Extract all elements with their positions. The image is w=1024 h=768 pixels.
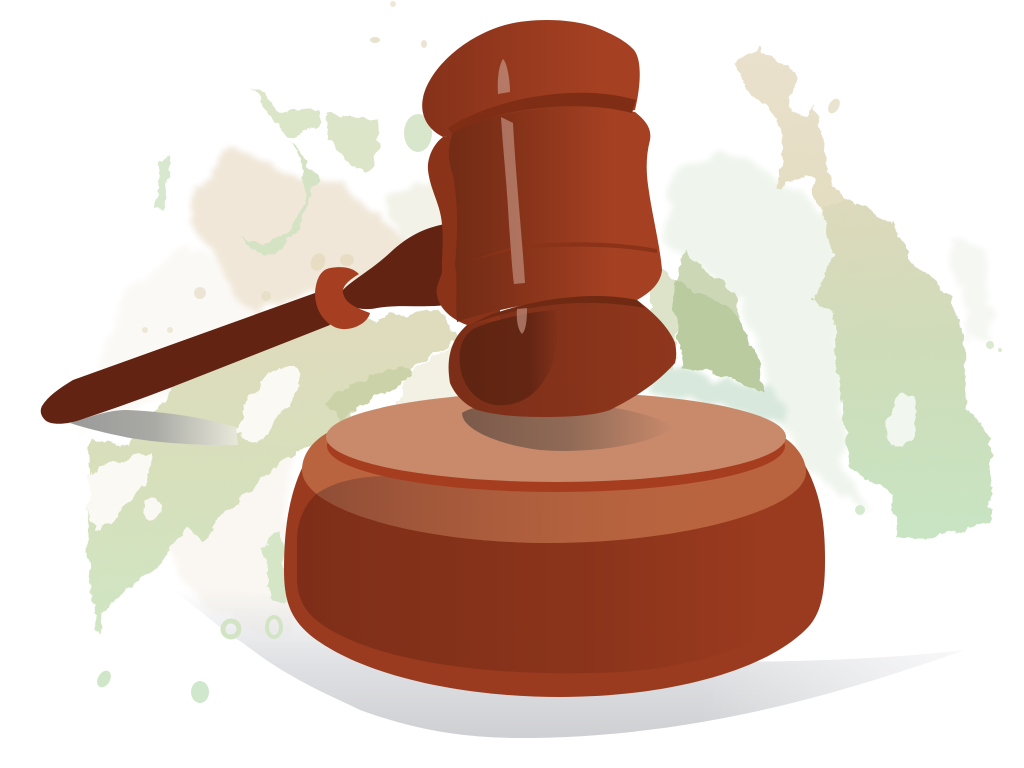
head lower dark side bbox=[460, 310, 558, 405]
floor shadow bbox=[196, 607, 951, 738]
olive and green mass left bbox=[88, 310, 458, 637]
pale green-white wash right bbox=[660, 150, 870, 510]
handle bbox=[41, 293, 330, 424]
beige streak bbox=[733, 48, 850, 240]
head middle bbox=[449, 106, 662, 322]
olive backdrop by head bbox=[650, 262, 682, 372]
head top cap bbox=[422, 20, 640, 137]
watercolor splatter bbox=[87, 48, 990, 637]
platform rim bbox=[327, 400, 785, 492]
green splash top one bbox=[250, 87, 320, 137]
highlight strip top bbox=[498, 59, 510, 94]
handle neck bbox=[341, 224, 445, 309]
upper band bbox=[448, 93, 636, 134]
highlight strip low bbox=[517, 308, 527, 334]
olive shard light cap bbox=[676, 250, 740, 320]
block body bbox=[284, 460, 825, 697]
small hole bbox=[143, 498, 161, 520]
green curve bbox=[242, 140, 320, 257]
head contact shadow bbox=[462, 402, 673, 451]
olive shard bbox=[673, 280, 765, 393]
highlight strip middle bbox=[501, 117, 525, 284]
watercolor washes bbox=[80, 147, 992, 640]
faint cream wash far left bbox=[80, 240, 260, 440]
handle shadow bbox=[70, 410, 238, 445]
handle collar bbox=[315, 267, 370, 329]
pale cream below head bbox=[150, 450, 292, 640]
top face shadow bbox=[316, 476, 552, 543]
green mass right bbox=[813, 200, 990, 537]
pale lower band right bbox=[655, 365, 790, 420]
cream tip behind head bbox=[395, 345, 462, 412]
block top face bbox=[302, 418, 806, 543]
olive dark patch bbox=[325, 365, 420, 420]
green left flecks bbox=[154, 155, 170, 210]
block inner shade bbox=[297, 476, 808, 673]
green patch next to block bbox=[262, 530, 288, 602]
hole right bbox=[886, 392, 917, 448]
pale wash top of neck bbox=[380, 180, 443, 240]
lower band bbox=[470, 296, 645, 325]
sound block bbox=[284, 392, 825, 697]
white blob near handle shadow bbox=[237, 367, 300, 443]
white hole left bbox=[87, 453, 150, 530]
faint wash far right bbox=[950, 237, 992, 340]
platform top bbox=[326, 392, 786, 482]
beige wash bbox=[187, 147, 425, 310]
head lower bbox=[449, 299, 676, 417]
mid seam bbox=[465, 242, 657, 262]
head outer edge bbox=[428, 130, 500, 325]
gavel bbox=[41, 20, 676, 424]
green splash top two bbox=[327, 112, 380, 170]
